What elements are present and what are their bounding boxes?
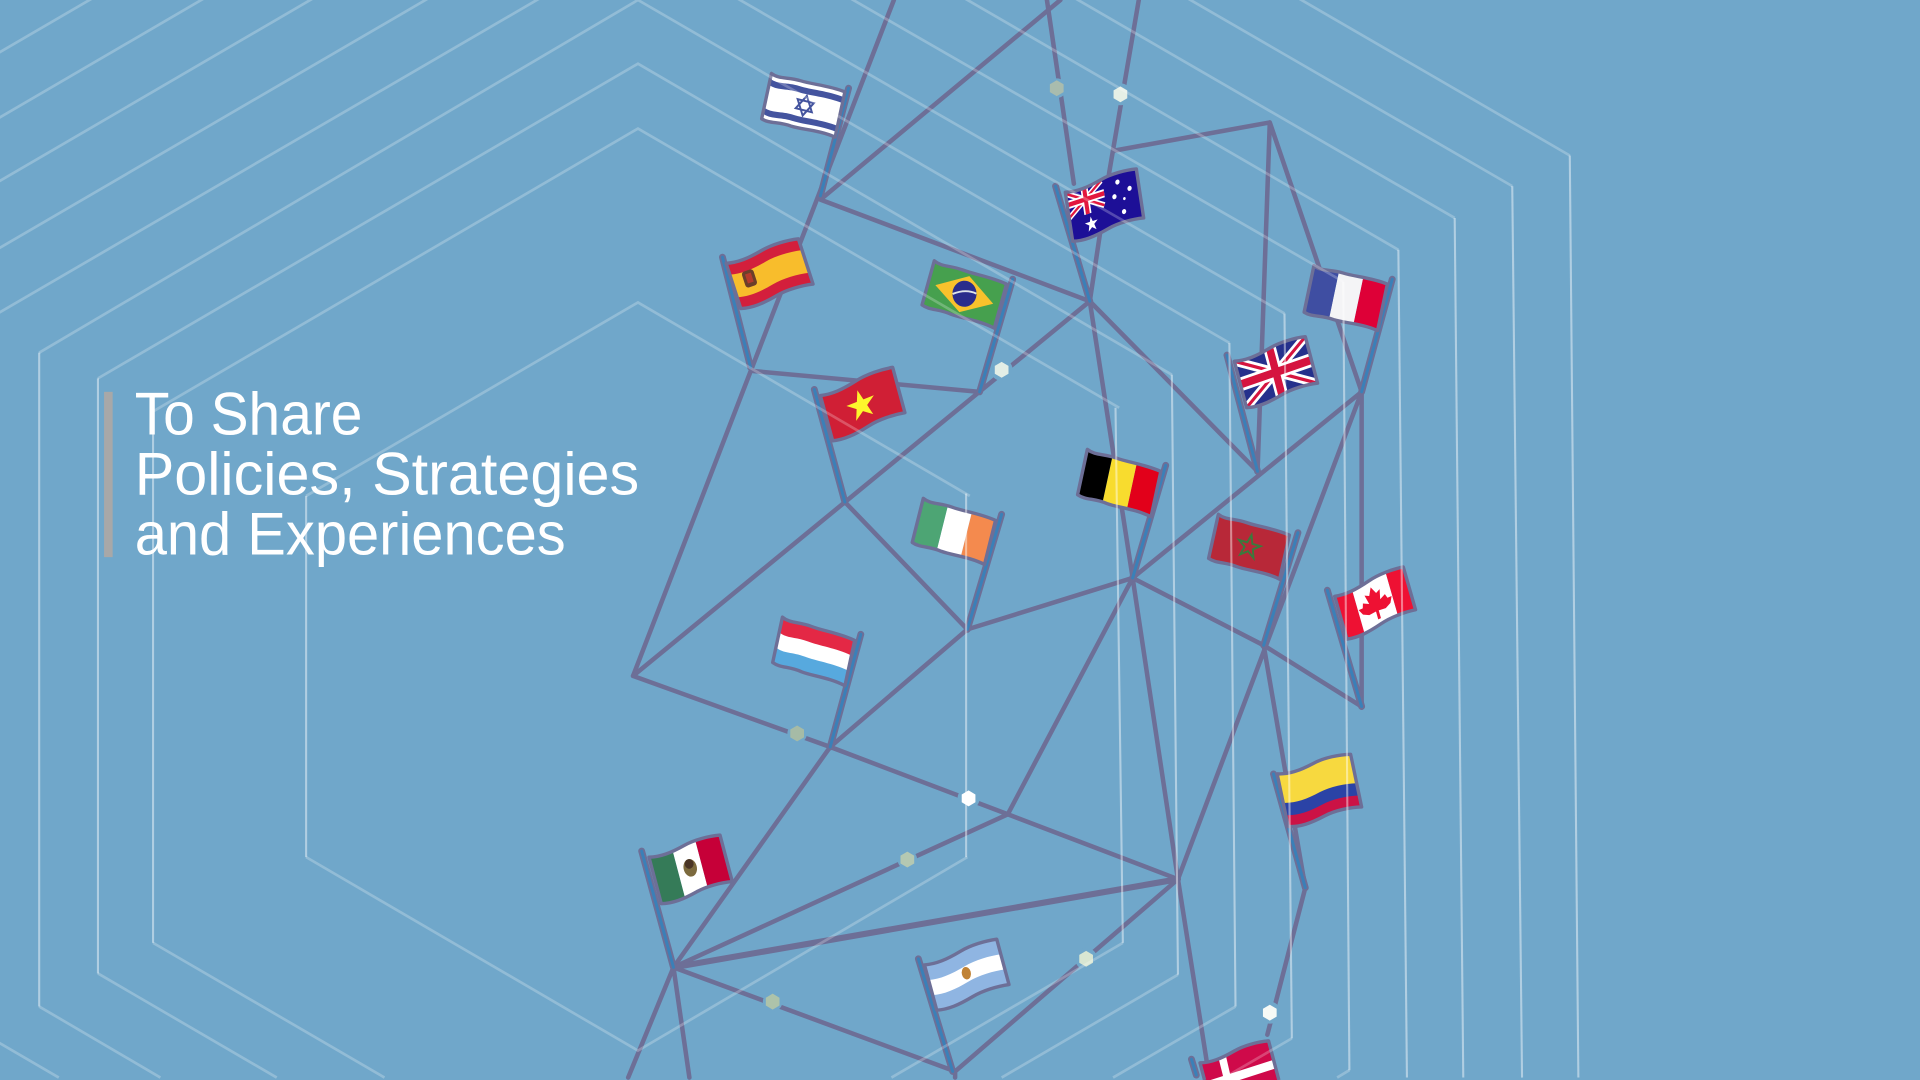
- flag: Canada: [1333, 565, 1418, 641]
- title accent bar: [104, 392, 113, 557]
- title: [135, 381, 639, 568]
- flag: Vietnam: [819, 366, 907, 442]
- flag: Colombia: [1276, 752, 1364, 828]
- flag: Belgium: [1076, 448, 1162, 518]
- flag: Spain: [724, 237, 815, 310]
- flag: Brazil: [920, 259, 1008, 330]
- network of connecting lines: [628, 0, 1362, 1078]
- flag: Mexico: [647, 833, 734, 906]
- flag: United Kingdom: [1232, 335, 1320, 410]
- glowing hexagonal nodes: [763, 78, 1281, 1024]
- flag: France: [1302, 264, 1388, 332]
- title: Policies, Strategies: [135, 441, 639, 508]
- flag: Australia: [1064, 167, 1146, 243]
- flag: Morocco: [1206, 512, 1292, 581]
- flag poles: [642, 88, 1392, 1075]
- title: and Experiences: [135, 501, 566, 568]
- flag: Argentina: [924, 938, 1011, 1012]
- flag: Israel: [760, 72, 846, 139]
- title: To Share: [135, 381, 362, 448]
- flag: Denmark: [1200, 1041, 1279, 1080]
- flag: Luxembourg: [771, 615, 856, 688]
- flag: Ireland: [910, 496, 996, 566]
